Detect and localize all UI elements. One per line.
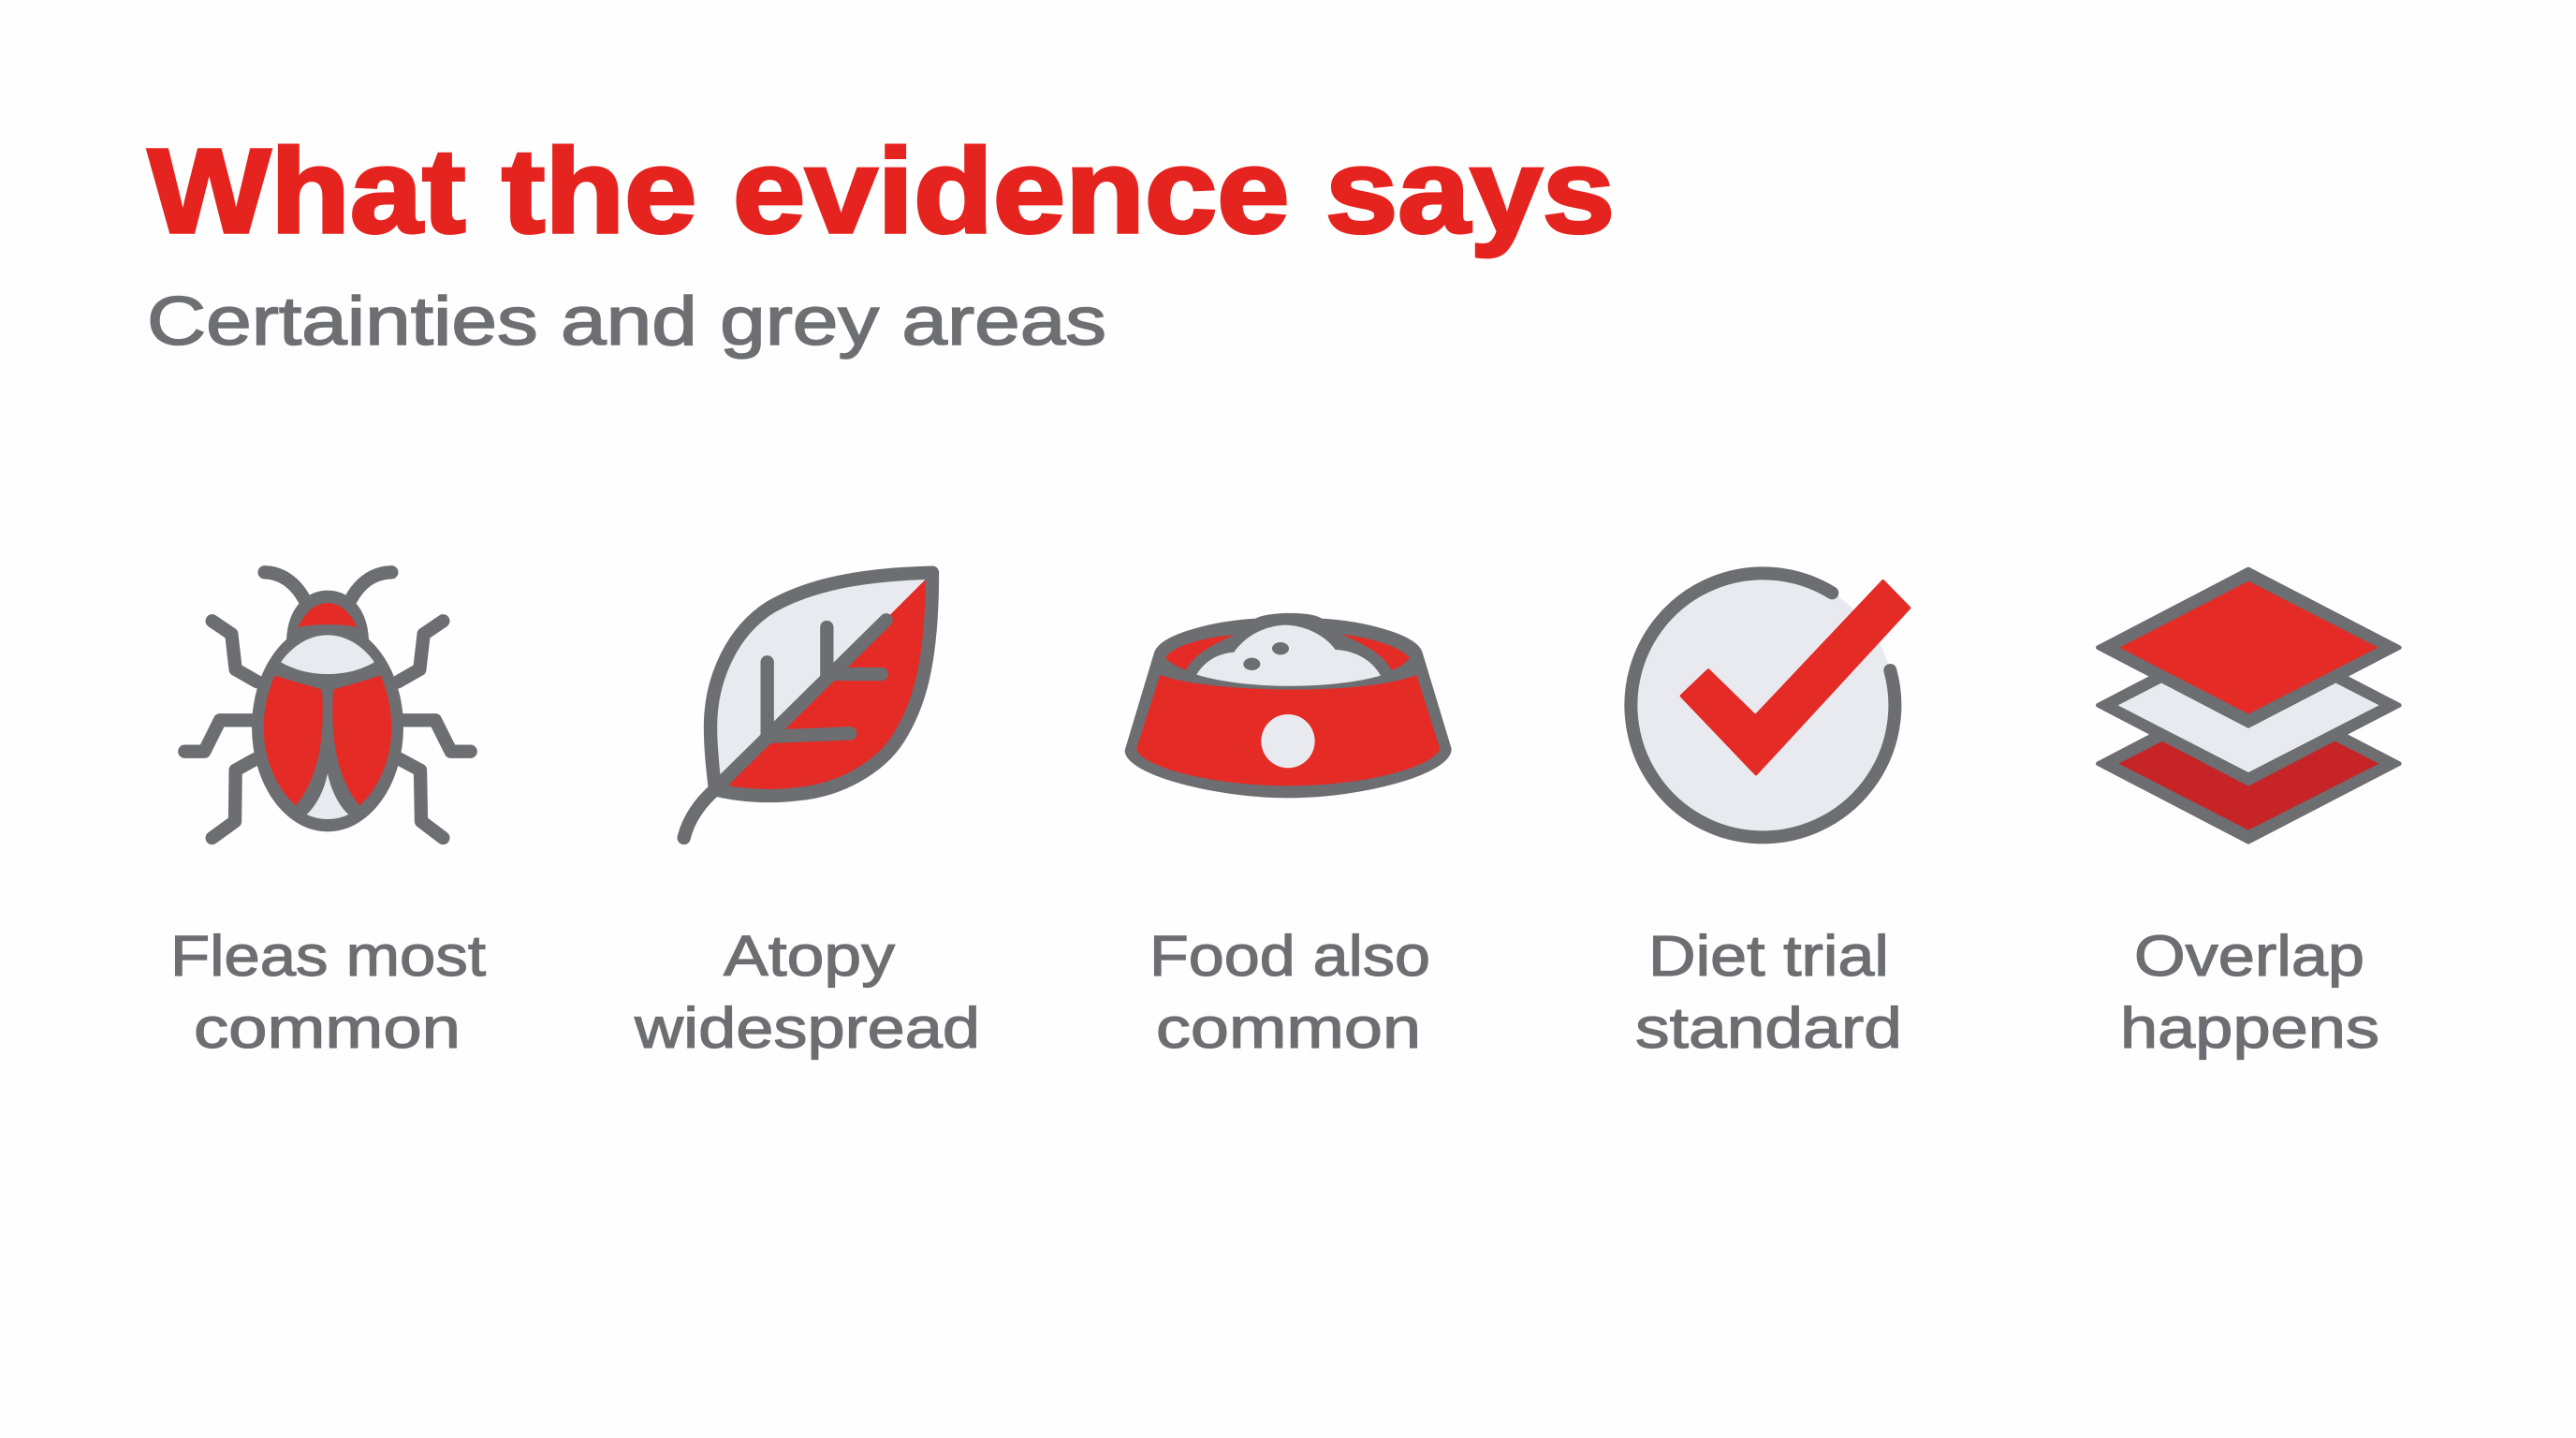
icon: bug (184, 572, 471, 838)
label: fleas: Fleas most (170, 924, 486, 988)
icon: check circle (1631, 573, 1910, 837)
label: overlap: Overlap (2134, 924, 2364, 988)
label: food: common (1156, 996, 1421, 1060)
label: diet trial (1635, 924, 1902, 1060)
item: overlap (2098, 569, 2399, 1060)
icon: stacked layers (2098, 569, 2399, 842)
label: food (1149, 924, 1430, 1060)
label: overlap (2120, 924, 2379, 1060)
icon: leaf (684, 573, 932, 838)
item: atopy (634, 573, 980, 1060)
label: food: Food also (1149, 924, 1430, 988)
item: food (1126, 615, 1450, 1060)
label: diet trial: standard (1635, 996, 1902, 1060)
title: What the evidence says (148, 125, 1615, 258)
label: atopy: widespread (634, 996, 980, 1060)
icon: food bowl (1126, 615, 1450, 797)
item: diet trial (1631, 573, 1910, 1060)
label: atopy (634, 924, 980, 1060)
item: fleas (170, 572, 486, 1060)
subtitle: Certainties and grey areas (147, 284, 1106, 360)
label: fleas: common (194, 996, 461, 1060)
label: atopy: Atopy (724, 924, 896, 988)
label: diet trial: Diet trial (1648, 924, 1889, 988)
label: fleas (170, 924, 486, 1060)
label: overlap: happens (2120, 996, 2379, 1060)
